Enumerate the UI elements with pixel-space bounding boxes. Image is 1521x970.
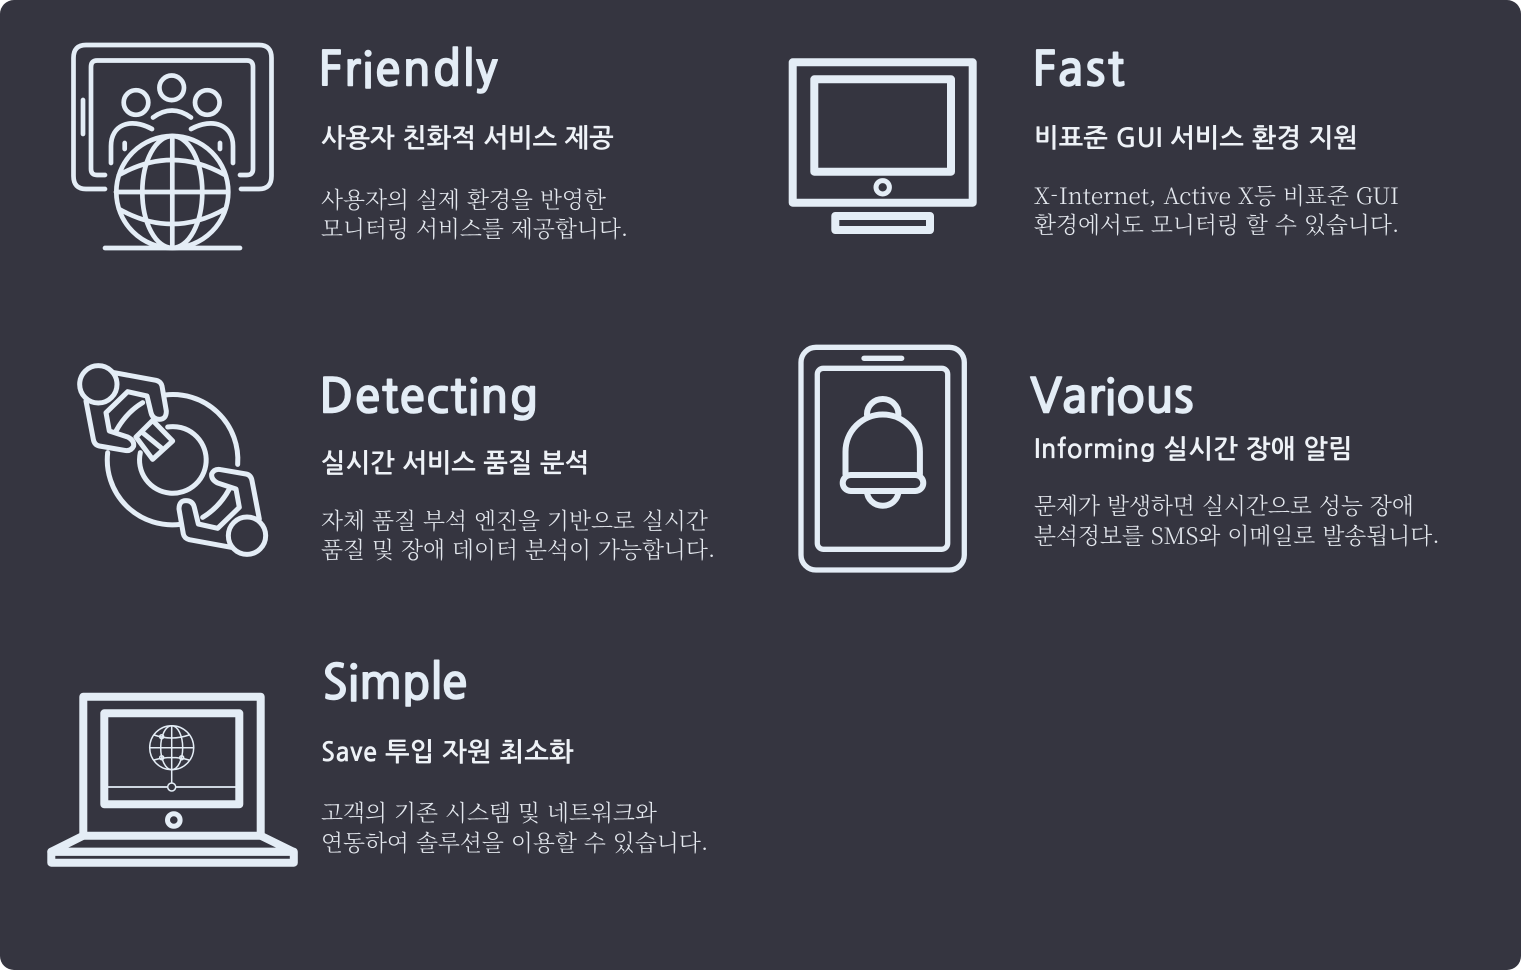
- description: 고객의 기존 시스템 및 네트워크와: [321, 795, 657, 828]
- description: X-Internet, Active X등 비표준 GUI: [1034, 178, 1399, 211]
- description: 품질 및 장애 데이터 분석이 가능합니다.: [321, 532, 715, 565]
- subheading: Save 투입 자원 최소화: [321, 739, 574, 765]
- subheading: 사용자 친화적 서비스 제공: [321, 125, 614, 151]
- description: 자체 품질 부석 엔진을 기반으로 실시간: [321, 502, 708, 536]
- panel: Fast: [788, 47, 1399, 240]
- icon: laptop with globe: [47, 692, 298, 867]
- subheading: 실시간 서비스 품질 분석: [321, 450, 589, 476]
- heading: Detecting: Detecting: [319, 374, 539, 421]
- heading: Simple: Simple: [322, 660, 467, 707]
- description: 분석정보를 SMS와 이메일로 발송됩니다.: [1034, 518, 1440, 550]
- description: 사용자의 실제 환경을 반영한: [321, 182, 606, 214]
- description: [321, 502, 715, 565]
- heading: Various: Various: [1030, 374, 1194, 421]
- description: 연동하여 솔루션을 이용할 수 있습니다.: [321, 824, 708, 858]
- panel: Simple: [47, 660, 708, 867]
- description: [1034, 488, 1440, 550]
- panel: Various: [798, 344, 1440, 573]
- description: 문제가 발생하면 실시간으로 성능 장애: [1034, 488, 1414, 521]
- description: [321, 182, 628, 244]
- description: [1034, 178, 1399, 240]
- heading: Fast: Fast: [1032, 47, 1126, 94]
- description: 모니터링 서비스를 제공합니다.: [321, 211, 628, 244]
- heading: Friendly: Friendly: [318, 47, 499, 94]
- subheading: Informing 실시간 장애 알림: [1034, 436, 1353, 462]
- panel: Detecting: [77, 363, 715, 565]
- icon: tablet with bell: [798, 344, 967, 573]
- description: [321, 795, 708, 858]
- icon: tablet with people and globe: [71, 42, 274, 250]
- description: 환경에서도 모니터링 할 수 있습니다.: [1034, 207, 1399, 240]
- panel: Friendly: [71, 42, 628, 250]
- icon: two people exchanging around circle: [77, 363, 268, 557]
- subheading: 비표준 GUI 서비스 환경 지원: [1034, 125, 1358, 151]
- icon: monitor: [788, 58, 977, 234]
